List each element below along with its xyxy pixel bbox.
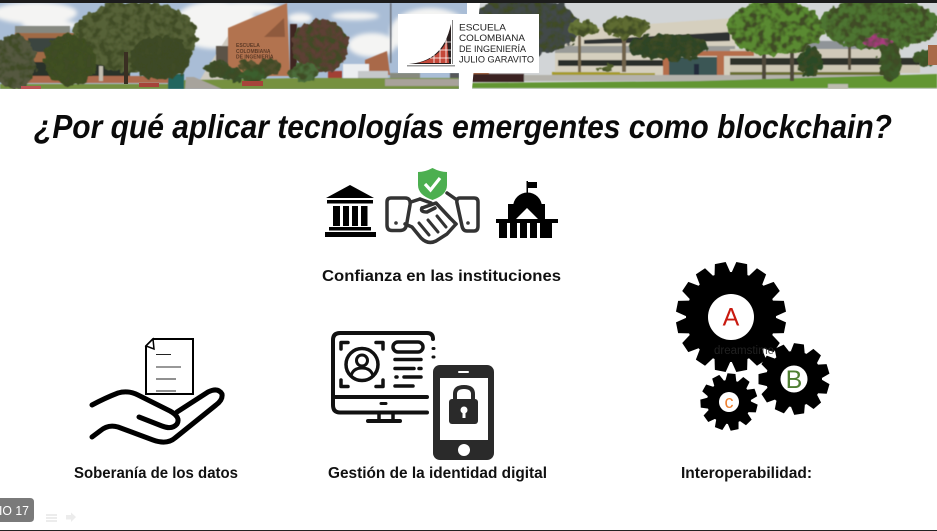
icon: faint slide controls <box>46 512 76 522</box>
slide number badge <box>0 498 34 522</box>
building lettering: ESCUELA <box>236 43 260 49</box>
logo wordmark: DE INGENIERÍA <box>459 44 527 55</box>
building lettering <box>236 43 274 58</box>
label: confianza: Confianza en las instituciones <box>322 268 561 285</box>
building lettering: DE INGENIERÍA <box>236 52 274 60</box>
icon: open hand <box>92 390 222 442</box>
logo wordmark: JULIO GARAVITO <box>459 54 534 66</box>
icon: gear C <box>698 371 760 433</box>
icon: gear C: c <box>724 392 734 412</box>
panel: gestión de la identidad digital <box>328 333 547 482</box>
logo wordmark <box>459 22 534 66</box>
logo wordmark: ESCUELA <box>459 22 507 34</box>
icon: document <box>146 339 193 394</box>
label: gestión: Gestión de la identidad digital <box>328 465 547 482</box>
logo: Escuela Colombiana de Ingeniería Julio Garavito <box>398 14 539 73</box>
panel: interoperabilidad <box>666 252 835 482</box>
label: interoperabilidad: Interoperabilidad: <box>681 465 812 482</box>
label: soberanía: Soberanía de los datos <box>74 465 238 482</box>
icon: phone with lock <box>433 365 494 460</box>
icon: green shield <box>418 168 447 200</box>
icon: gear B <box>753 339 835 420</box>
panel: soberanía de los datos <box>74 339 238 482</box>
logo curve mark <box>407 20 455 66</box>
logo wordmark: COLOMBIANA <box>459 33 526 44</box>
icon: gear A: A <box>723 304 740 332</box>
panel: confianza en las instituciones <box>322 168 561 285</box>
icon: handshake <box>387 193 478 242</box>
icon: monitor with profile <box>333 333 434 421</box>
watermark: dreamstime <box>714 345 774 357</box>
header photo banner <box>0 0 937 90</box>
photo: left campus building <box>0 1 470 90</box>
icon: gear B: B <box>786 366 802 394</box>
photo: right campus building <box>471 0 937 89</box>
icon: bank <box>325 185 376 237</box>
icon: gear A <box>666 252 796 382</box>
building lettering: COLOMBIANA <box>236 49 271 55</box>
icon: government building <box>496 181 558 238</box>
